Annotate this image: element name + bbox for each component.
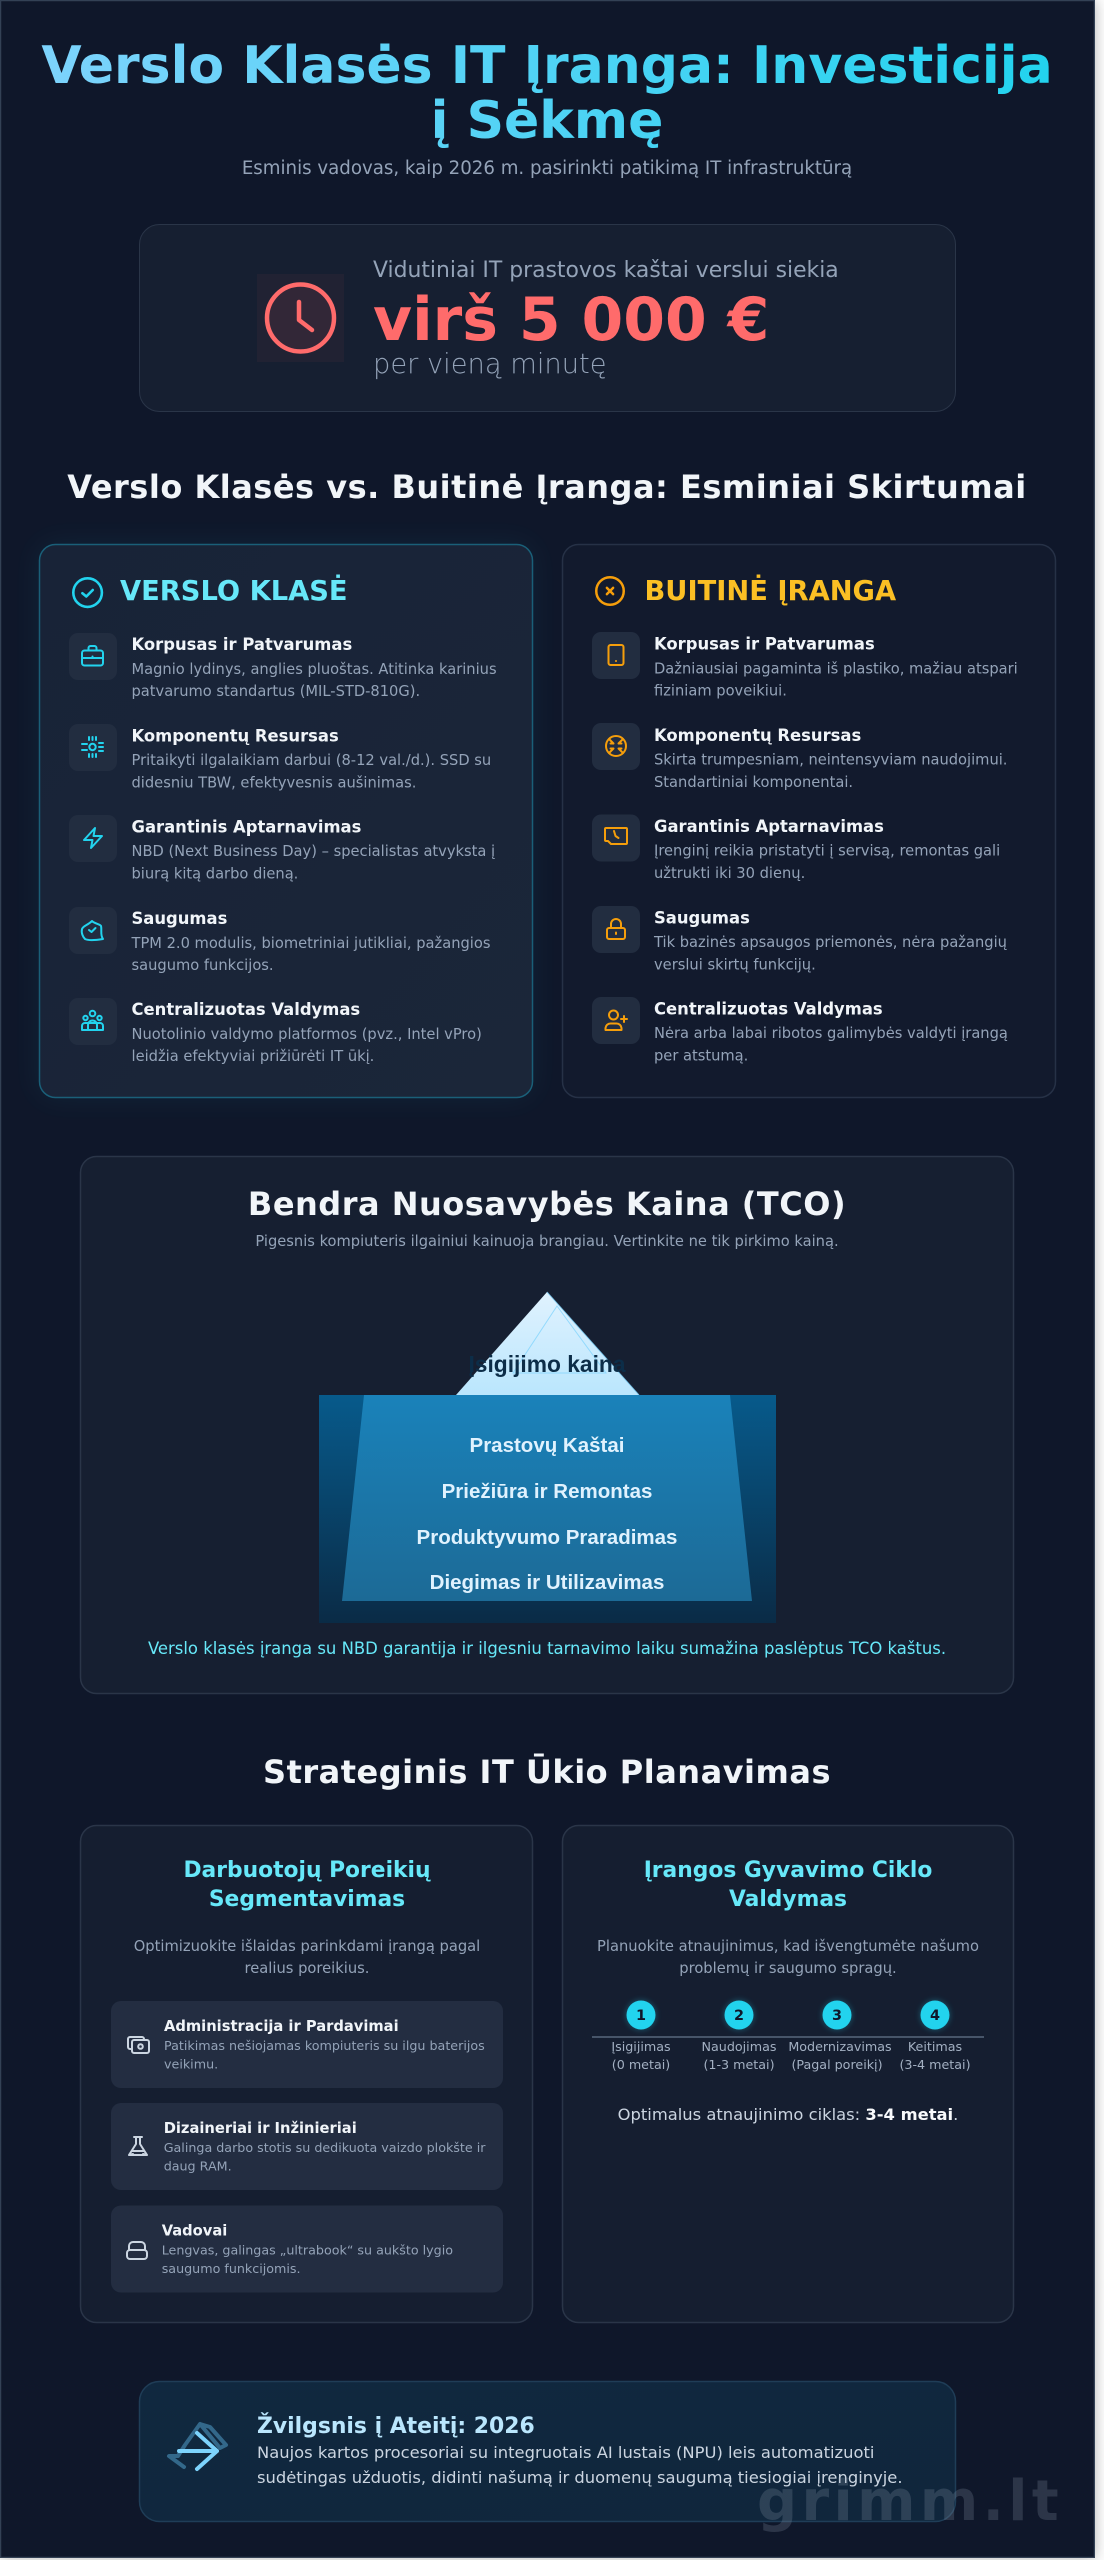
panel heading: Įrangos Gyvavimo Ciklo (644, 1858, 932, 1883)
step 2: Naudojimas (702, 2039, 776, 2054)
stat value: virš 5 000 € (373, 285, 769, 355)
card: administration: veikimu. (164, 2056, 218, 2072)
item: warranty: užtrukti iki 30 dienų. (654, 865, 805, 882)
item: components: Pritaikyti ilgalaikiam darbui (8-12 val./d.). SSD su (132, 752, 491, 769)
item: body (592, 632, 1018, 700)
card: designers: daug RAM. (164, 2158, 232, 2174)
hidden cost labels (417, 1434, 677, 1594)
item: components: Komponentų Resursas (654, 726, 861, 745)
main title: Verslo Klasės IT Įranga: Investicija (41, 36, 1053, 96)
card: executives (111, 2206, 503, 2292)
panel heading: BUITINĖ ĮRANGA (644, 575, 896, 607)
watermark: grimm.lt (757, 2469, 1063, 2534)
step 3: (Pagal poreikį) (791, 2057, 883, 2072)
item: security: Saugumas (654, 908, 750, 928)
iceberg chart (319, 1292, 776, 1623)
item: warranty: NBD (Next Business Day) – specialistas atvyksta į (132, 843, 495, 860)
stat label: Vidutiniai IT prastovos kaštai verslui siekia (373, 258, 839, 283)
step 4: (3-4 metai) (899, 2057, 971, 2072)
panel: TCO (80, 1156, 1014, 1694)
item: components: Standartiniai komponentai. (654, 774, 853, 791)
panel heading (183, 1858, 431, 1912)
panel intro: realius poreikius. (245, 1960, 369, 1977)
iceberg tip (456, 1292, 639, 1395)
TCO note: Verslo klasės įranga su NBD garantija ir ilgesniu tarnavimo laiku sumažina paslėptus TCO kaštus. (148, 1639, 946, 1658)
item: warranty: Garantinis Aptarnavimas (132, 818, 361, 836)
item: management: Nuotolinio valdymo platformos (pvz., Intel vPro) (132, 1026, 482, 1043)
panel heading: Segmentavimas (209, 1887, 405, 1912)
step 1: 1 (636, 2008, 646, 2024)
hidden cost labels: Produktyvumo Praradimas (417, 1526, 677, 1549)
card: designers: Galinga darbo stotis su dedikuota vaizdo plokšte ir (164, 2140, 486, 2155)
card: designers: Dizaineriai ir Inžinieriai (164, 2120, 357, 2137)
panel heading: Darbuotojų Poreikių (183, 1858, 431, 1883)
step 4: Keitimas (908, 2039, 962, 2054)
item: body: Korpusas ir Patvarumas (132, 635, 352, 654)
item: components: Komponentų Resursas (132, 726, 339, 746)
TCO heading: Bendra Nuosavybės Kaina (TCO) (248, 1185, 846, 1223)
item: management (69, 998, 482, 1065)
item: body: Magnio lydinys, anglies pluoštas. Atitinka karinius (132, 661, 497, 678)
card: administration: Administracija ir Pardavimai (164, 2018, 399, 2035)
card: administration: Patikimas nešiojamas kompiuteris su ilgu baterijos (164, 2038, 485, 2053)
item: management: leidžia efektyviai prižiūrėti IT ūkį. (132, 1048, 374, 1065)
item: components: didesniu TBW, efektyvesnis aušinimas. (132, 774, 416, 792)
step 4 (899, 2000, 971, 2072)
outlook text: sudėtingas užduotis, didinti našumą ir duomenų saugumą tiesiogiai įrenginyje. (257, 2468, 903, 2487)
item: components: Skirta trumpesniam, neintensyviam naudojimui. (654, 752, 1007, 768)
step 2 (702, 2000, 776, 2072)
step 1: Įsigijimas (611, 2039, 671, 2054)
item: security (69, 907, 490, 974)
item: security: TPM 2.0 modulis, biometriniai jutikliai, pažangios (130, 935, 490, 952)
item: management: Centralizuotas Valdymas (654, 1000, 883, 1018)
outlook text (257, 2443, 903, 2487)
item: warranty: Garantinis Aptarnavimas (654, 817, 884, 836)
icon: check circle (73, 578, 102, 607)
tip label: Įsigijimo kaina (468, 1351, 626, 1377)
underwater iceberg (342, 1395, 752, 1601)
item: body: Korpusas ir Patvarumas (654, 634, 875, 654)
panel heading: Valdymas (729, 1887, 847, 1912)
heading: strategic planning: Strateginis IT Ūkio Planavimas (263, 1753, 831, 1791)
panel: lifecycle (562, 1826, 1014, 2322)
panel intro: problemų ir saugumo spragų. (679, 1960, 897, 1977)
step 2: 2 (734, 2008, 744, 2024)
item: body (69, 633, 497, 700)
item: security (592, 906, 1007, 974)
outlook heading: Žvilgsnis į Ateitį: 2026 (257, 2413, 535, 2439)
panel intro (134, 1938, 480, 1977)
item: management (592, 997, 1008, 1064)
water (319, 1395, 776, 1623)
panel heading: VERSLO KLASĖ (120, 575, 348, 607)
step 1: (0 metai) (612, 2057, 670, 2072)
step 2: (1-3 metai) (703, 2057, 775, 2072)
item: warranty (69, 815, 495, 882)
step 3: 3 (832, 2008, 842, 2024)
icon: rocket arrow (169, 2424, 226, 2469)
hidden cost labels: Diegimas ir Utilizavimas (430, 1571, 664, 1594)
subtitle: Esminis vadovas, kaip 2026 m. pasirinkti patikimą IT infrastruktūrą (242, 158, 852, 179)
panel: downtime cost (140, 224, 956, 412)
step 3 (788, 2000, 892, 2072)
hidden cost labels: Prastovų Kaštai (470, 1434, 624, 1457)
stat unit: per vieną minutę (373, 349, 607, 380)
outlook text: Naujos kartos procesoriai su integruotais AI lustais (NPU) leis automatizuoti (257, 2443, 874, 2462)
item: body: patvarumo standartus (MIL-STD-810G). (132, 683, 420, 700)
icon: clock (257, 274, 344, 362)
item: security: saugumo funkcijos. (132, 957, 274, 974)
timeline (592, 2000, 984, 2072)
step 1 (611, 2000, 671, 2072)
panel intro (597, 1938, 979, 1977)
main title: į Sėkmę (431, 91, 663, 151)
step 3: Modernizavimas (788, 2039, 892, 2054)
panel: employee segmentation (80, 1826, 532, 2322)
item: management: per atstumą. (654, 1048, 748, 1064)
panel: consumer hardware (562, 544, 1056, 1098)
card: executives: Vadovai (162, 2222, 227, 2240)
card: executives: Lengvas, galingas „ultrabook“ su aukšto lygio (162, 2242, 453, 2258)
optimal cycle note: Optimalus atnaujinimo ciklas: 3-4 metai. (618, 2105, 958, 2124)
panel heading (644, 1858, 932, 1912)
item: security: Tik bazinės apsaugos priemonės, nėra pažangių (653, 934, 1007, 951)
heading: comparison: Verslo Klasės vs. Buitinė Įranga: Esminiai Skirtumai (67, 468, 1027, 506)
card: administration (111, 2001, 503, 2088)
item: warranty: Įrenginį reikia pristatyti į servisą, remontas gali (654, 842, 1000, 860)
item: security: Saugumas (132, 909, 227, 928)
panel intro: Optimizuokite išlaidas parinkdami įrangą pagal (134, 1938, 480, 1955)
item: management: Centralizuotas Valdymas (132, 1000, 360, 1019)
card: designers (111, 2103, 503, 2190)
panel: future outlook (140, 2382, 956, 2522)
item: warranty: biurą kitą darbo dieną. (132, 866, 298, 882)
card: executives: saugumo funkcijomis. (162, 2261, 301, 2276)
item: body: fiziniam poveikiui. (654, 682, 787, 700)
icon: x circle (596, 577, 624, 605)
main title (41, 36, 1053, 151)
step 4: 4 (930, 2008, 940, 2024)
item: components (69, 724, 491, 792)
item: components (592, 723, 1007, 791)
panel: business class (39, 544, 532, 1098)
hidden cost labels: Priežiūra ir Remontas (442, 1480, 652, 1503)
panel intro: Planuokite atnaujinimus, kad išvengtumėte našumo (597, 1938, 979, 1955)
item: warranty (592, 814, 1000, 882)
item: management: Nėra arba labai ribotos galimybės valdyti įrangą (654, 1025, 1008, 1042)
TCO subtitle: Pigesnis kompiuteris ilgainiui kainuoja brangiau. Vertinkite ne tik pirkimo kainą. (255, 1233, 839, 1250)
item: security: verslui skirtų funkcijų. (654, 956, 816, 974)
item: body: Dažniausiai pagaminta iš plastiko, mažiau atspari (654, 660, 1018, 678)
